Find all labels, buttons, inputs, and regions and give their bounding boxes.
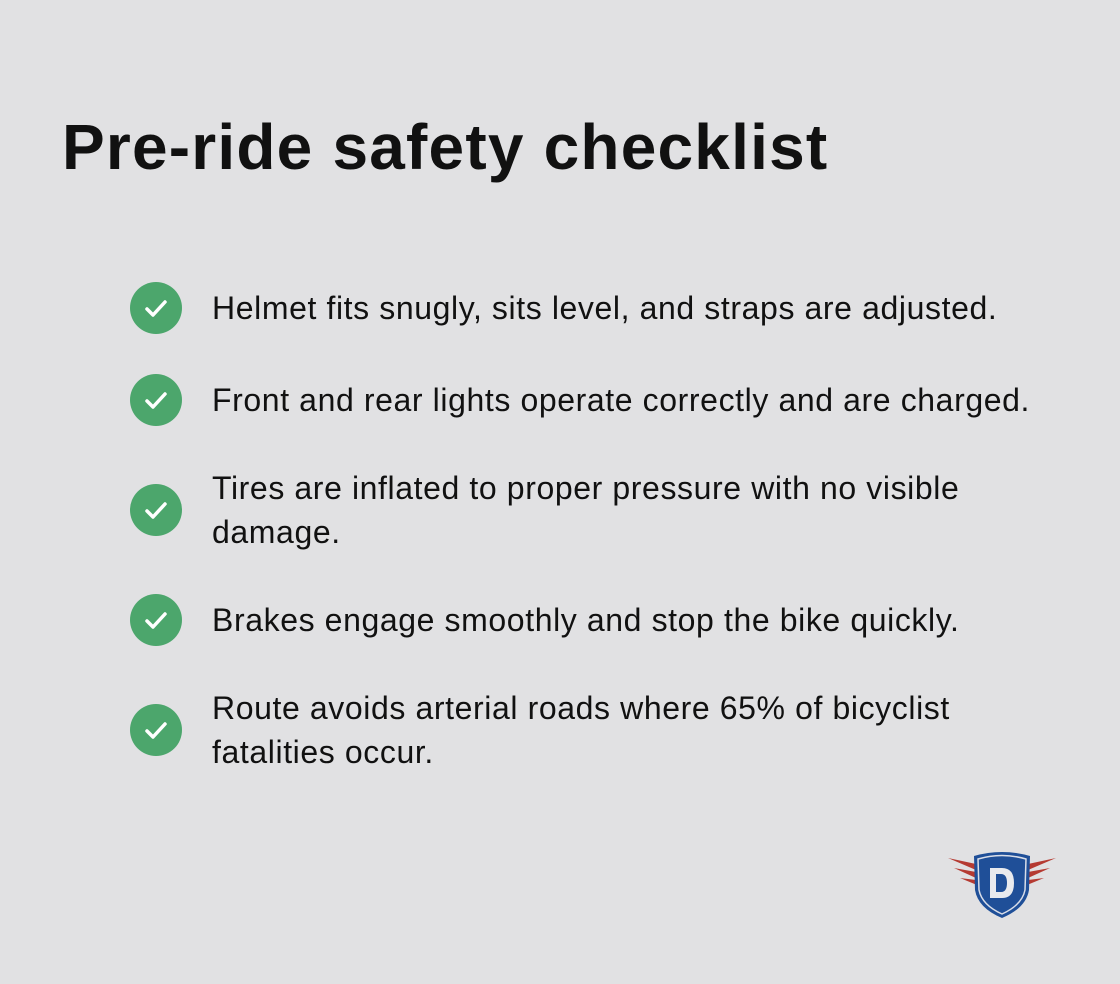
icon: check bbox=[130, 594, 182, 646]
icon: check bbox=[130, 484, 182, 536]
text: Helmet fits snugly, sits level, and straps are adjusted. bbox=[212, 290, 997, 326]
title: Pre-ride safety checklist bbox=[62, 111, 828, 183]
text: Route avoids arterial roads where 65% of bicyclist fatalities occur. bbox=[212, 690, 950, 770]
item: tires bbox=[130, 470, 959, 550]
item: brakes bbox=[130, 594, 959, 646]
icon: check bbox=[130, 704, 182, 756]
text: Brakes engage smoothly and stop the bike quickly. bbox=[212, 602, 959, 638]
text: Front and rear lights operate correctly and are charged. bbox=[212, 382, 1030, 418]
logo bbox=[948, 852, 1056, 918]
text: Tires are inflated to proper pressure with no visible damage. bbox=[212, 470, 959, 550]
item: lights bbox=[130, 374, 1030, 426]
icon: check bbox=[130, 282, 182, 334]
icon: check bbox=[130, 374, 182, 426]
item: route bbox=[130, 690, 950, 770]
item: helmet bbox=[130, 282, 997, 334]
